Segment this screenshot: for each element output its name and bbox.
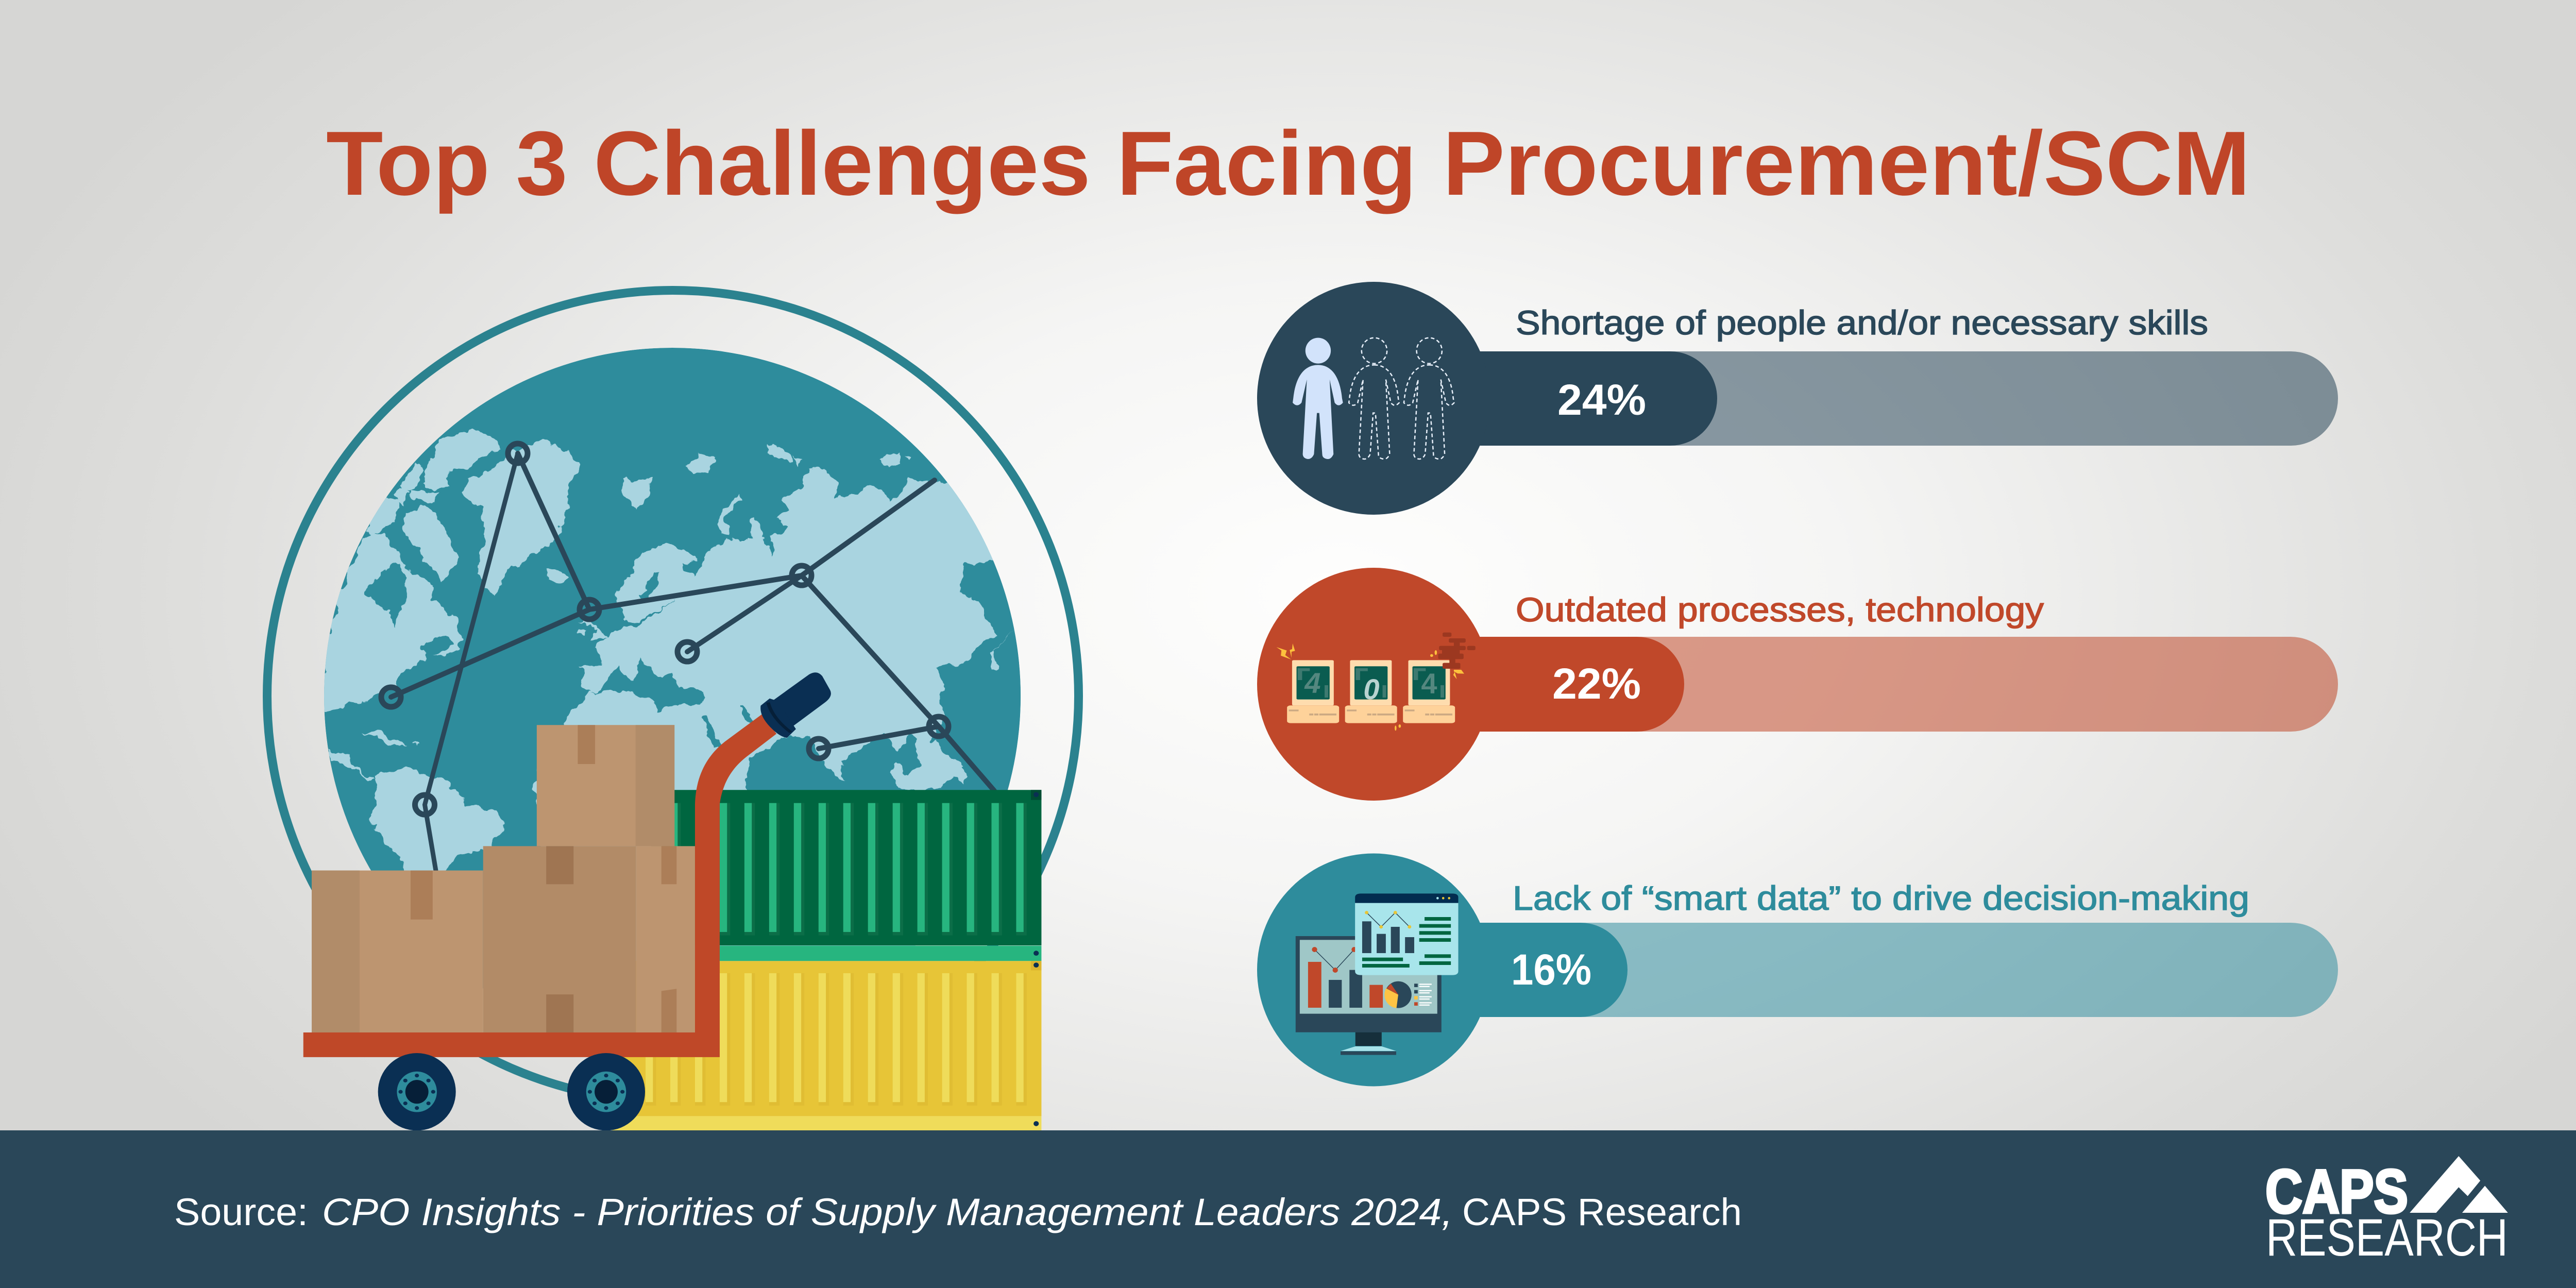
panel: lack of smart data — [1257, 853, 2338, 1086]
logo: CAPS Research — [2265, 1156, 2508, 1267]
icon: broken 404 computers: 0 — [1363, 673, 1380, 705]
network nodes — [381, 444, 948, 815]
footer band — [0, 1130, 2576, 1288]
title: Top 3 Challenges Facing Procurement/SCM — [326, 112, 2250, 214]
source line: CPO Insights - Priorities of Supply Management Leaders 2024, — [322, 1191, 1453, 1233]
yellow shipping container — [612, 961, 1041, 1131]
supply network lines — [391, 453, 994, 871]
cart handle grip — [760, 672, 831, 738]
label 1: Shortage of people and/or necessary skills — [1516, 303, 2208, 342]
circle 1 — [1257, 282, 1490, 515]
icon: broken 404 computers: 4 — [1421, 667, 1437, 700]
cart wheel left — [378, 1053, 456, 1130]
label 2: Outdated processes, technology — [1516, 590, 2044, 629]
source line — [174, 1191, 1742, 1233]
bar track 1 — [1443, 351, 2338, 446]
logo: CAPS Research: CAPS — [2265, 1157, 2408, 1226]
icon: dashboards on monitor — [1296, 893, 1458, 1055]
source line: Source: — [174, 1191, 308, 1233]
icon: broken 404 computers: 4 — [1304, 667, 1321, 699]
bar value 22% — [1374, 637, 1684, 732]
panel: outdated processes — [1257, 568, 2338, 801]
bar value 24% — [1374, 351, 1717, 446]
bar value 16% — [1374, 923, 1628, 1017]
bar track 3 — [1443, 923, 2338, 1017]
illustration: globe, network, containers and hand cart — [263, 286, 1083, 1130]
source line: CAPS Research — [1462, 1191, 1742, 1233]
hand cart frame — [303, 715, 776, 1057]
circle 2 — [1257, 568, 1490, 801]
green shipping container — [651, 790, 1041, 961]
panel: shortage of people — [1257, 282, 2338, 515]
icon: one person and two missing people — [1293, 338, 1454, 459]
value 22%: 22% — [1552, 659, 1641, 708]
cart wheel right — [567, 1053, 645, 1130]
globe outer ring — [267, 291, 1079, 1101]
value 24%: 24% — [1557, 376, 1646, 424]
label 3: Lack of “smart data” to drive decision-making — [1513, 879, 2249, 917]
icon: broken 404 computers — [1276, 633, 1476, 731]
bar track 2 — [1443, 637, 2338, 732]
logo: CAPS Research: RESEARCH — [2266, 1208, 2508, 1267]
value 16%: 16% — [1511, 945, 1591, 994]
circle 3 — [1257, 853, 1490, 1086]
globe with world map — [324, 348, 1021, 988]
cardboard boxes — [312, 725, 695, 1032]
